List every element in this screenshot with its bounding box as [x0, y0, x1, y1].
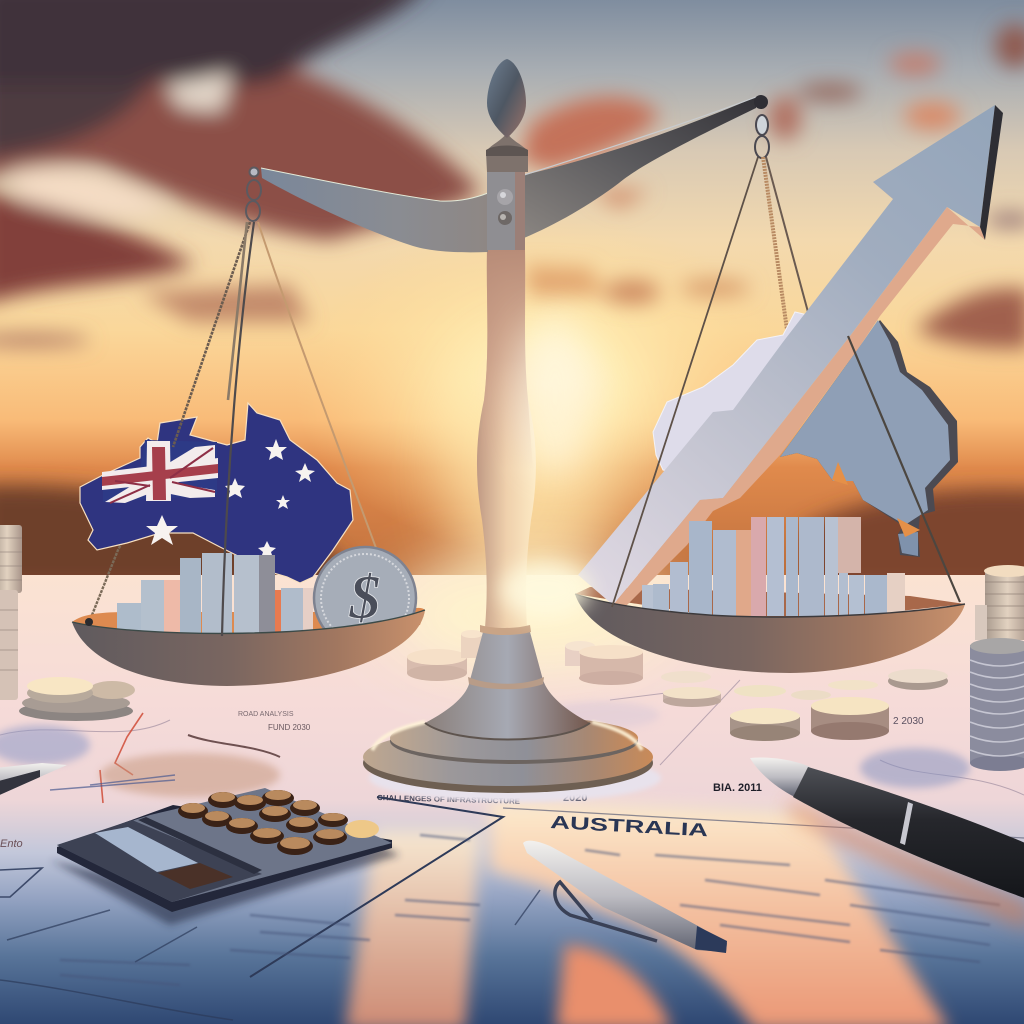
pole: column — [477, 250, 536, 628]
left pan: rear cords — [90, 222, 376, 620]
right pan: hook — [755, 115, 769, 158]
left pan: bowl — [72, 610, 425, 686]
beam: finial — [487, 59, 526, 138]
right pan: arrow — [578, 105, 1003, 609]
balance beam — [261, 59, 768, 252]
right scale pan assembly — [575, 105, 1003, 673]
flag: union jack — [102, 440, 218, 503]
text: map and document labels: BIA. 2011 — [713, 782, 762, 794]
text: map and document labels: AUSTRALIA — [550, 812, 709, 840]
pen: left edge — [0, 763, 67, 797]
beam: centre block — [487, 172, 525, 250]
text: map and document labels: FUND 2030 — [268, 723, 311, 732]
left pan: bars — [117, 553, 313, 637]
text: map and document labels — [0, 711, 924, 850]
right pan: bowl — [575, 594, 965, 673]
left pan: hook — [246, 168, 261, 221]
left pan: front cords — [173, 222, 254, 636]
left scale pan assembly — [72, 168, 425, 686]
calculator: screen — [95, 827, 198, 872]
beam: right arm — [524, 97, 756, 238]
text: map and document labels: CHALLENGES OF INFRASTRUCTURE — [377, 793, 520, 806]
arrow: dark head edge — [980, 105, 1003, 240]
text: map and document labels: Ento — [0, 838, 23, 850]
left pan: bowl interior — [72, 608, 425, 640]
coin stacks on table — [0, 525, 1024, 771]
right pan: bowl interior — [575, 587, 965, 625]
sky background — [0, 0, 1024, 600]
scale base and pole — [363, 250, 661, 802]
coin stacks: centre — [407, 630, 643, 685]
pen: silver front — [523, 841, 727, 953]
right pan: silver Australia map — [653, 312, 958, 557]
sun light bands on documents — [345, 800, 950, 1024]
document sheets — [0, 797, 1024, 1020]
beam: left arm — [261, 168, 488, 252]
coin stack: far left — [0, 525, 22, 700]
base: bottom disc — [363, 733, 653, 793]
text: map and document labels: ROAD ANALYSIS — [238, 711, 294, 718]
coin stacks: far right — [970, 565, 1024, 771]
coin stacks: right — [661, 669, 948, 741]
distant hills — [0, 340, 1024, 600]
right pan: rear cords — [763, 157, 808, 337]
arrow: barb underside — [873, 182, 903, 199]
base: cone — [425, 632, 590, 740]
base: middle tier — [390, 718, 638, 764]
calculator: keys — [178, 790, 348, 855]
beam: collar — [486, 133, 528, 172]
beam: end knob — [754, 95, 768, 109]
left pan: dollar coin: $ — [348, 564, 380, 632]
coin stack: front left — [19, 677, 135, 721]
left pan: dollar coin — [314, 547, 416, 649]
horizon glare — [500, 562, 590, 618]
text: map and document labels: 2020 — [563, 792, 587, 804]
pen: large black right — [750, 757, 1024, 930]
table with map — [0, 560, 1024, 1024]
right pan: front cords — [612, 157, 960, 607]
flag: stars — [146, 439, 315, 558]
text: map and document labels: 2 2030 — [893, 716, 924, 727]
clouds — [0, 0, 1024, 348]
calculator — [50, 788, 400, 925]
right pan: bars — [642, 517, 905, 616]
sun glare — [515, 315, 595, 475]
left pan: Australia flag map — [80, 403, 353, 583]
arrow: side face — [613, 207, 985, 609]
arrow: top face — [578, 105, 995, 605]
